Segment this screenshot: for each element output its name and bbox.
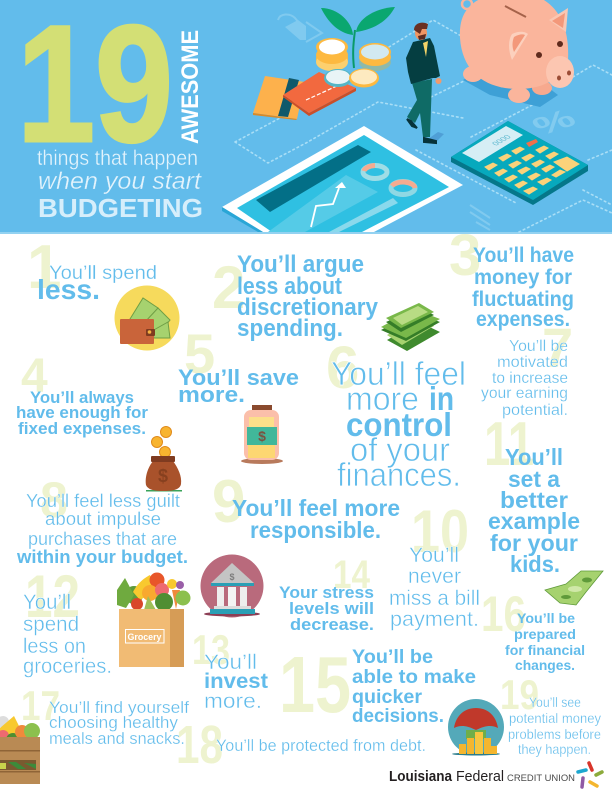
text: money for bbox=[474, 266, 572, 289]
text: quicker bbox=[352, 686, 422, 708]
text: meals and snacks. bbox=[49, 729, 185, 748]
number 6: 6 bbox=[326, 334, 359, 401]
text: for your bbox=[490, 530, 578, 556]
text: they happen. bbox=[518, 741, 591, 757]
text: decrease. bbox=[290, 616, 374, 634]
header banner bbox=[0, 0, 612, 234]
icon: umbrella over coins bbox=[448, 699, 504, 756]
text: decisions. bbox=[352, 705, 444, 727]
icon: money bag with coins: $ bbox=[158, 466, 168, 486]
text: potential. bbox=[502, 402, 568, 419]
illustration: calculator bbox=[451, 121, 588, 205]
text: prepared bbox=[514, 626, 576, 642]
icon: stack of money bbox=[381, 303, 440, 351]
text: You’ll be bbox=[509, 338, 568, 355]
illustration: credit cards bbox=[253, 72, 356, 120]
text: for financial bbox=[505, 642, 585, 658]
text: You’ll feel more bbox=[232, 495, 400, 521]
icon: percent sign: % bbox=[526, 103, 582, 141]
text: better bbox=[500, 487, 568, 513]
text bold: invest bbox=[204, 670, 268, 693]
text: You’ll argue bbox=[237, 251, 364, 278]
word: awesome: AWESOME bbox=[177, 30, 204, 144]
logo wordmark: CREDIT UNION bbox=[507, 773, 575, 784]
icon: jar of coins: $ bbox=[258, 428, 266, 444]
number 4: 4 bbox=[21, 350, 48, 403]
text: spend bbox=[23, 613, 79, 636]
text: purchases that are bbox=[28, 529, 177, 549]
text: You’ll be bbox=[352, 646, 433, 668]
text: expenses. bbox=[476, 308, 570, 331]
item 6 bbox=[326, 334, 466, 493]
text: less about bbox=[237, 273, 342, 300]
text: kids. bbox=[510, 551, 560, 577]
text: set a bbox=[508, 466, 560, 492]
number 10: 10 bbox=[411, 498, 469, 565]
text: more bbox=[346, 380, 419, 417]
text: example bbox=[488, 508, 580, 534]
icon: flying banknote bbox=[545, 571, 603, 605]
icon: grocery bag bbox=[117, 572, 190, 667]
text: never bbox=[408, 565, 461, 588]
text bold: within your budget. bbox=[16, 547, 188, 567]
label: grocery: Grocery bbox=[128, 632, 162, 642]
logo wordmark: Federal bbox=[456, 769, 504, 785]
text: choosing healthy bbox=[49, 713, 179, 732]
item 13 bbox=[192, 626, 268, 713]
item 7 bbox=[481, 316, 573, 419]
text: You’ll bbox=[505, 444, 563, 470]
title: 19 awesome things bbox=[17, 0, 204, 223]
icon: bank building: $ bbox=[229, 572, 235, 582]
text: groceries. bbox=[23, 655, 112, 678]
text: less on bbox=[23, 635, 86, 658]
number 5: 5 bbox=[184, 322, 215, 385]
text: You’ll spend bbox=[49, 262, 157, 284]
item 10 bbox=[389, 498, 480, 631]
subtitle line 1: things that happen bbox=[37, 147, 198, 170]
text bold: control bbox=[346, 406, 452, 443]
text: You’ll be protected from debt. bbox=[216, 737, 426, 755]
number 8: 8 bbox=[40, 472, 68, 528]
item 9 bbox=[212, 468, 400, 543]
text: You’ll save bbox=[178, 365, 299, 390]
icon: crate of vegetables bbox=[0, 716, 40, 784]
icon: money bag with coins bbox=[146, 426, 182, 492]
number 13: 13 bbox=[192, 626, 230, 673]
text: potential money bbox=[509, 710, 601, 726]
number 11: 11 bbox=[484, 410, 534, 479]
subtitle line 3: BUDGETING bbox=[38, 195, 203, 223]
text: motivated bbox=[497, 354, 568, 371]
illustration: tablet with charts bbox=[222, 126, 463, 232]
text: more. bbox=[178, 382, 245, 407]
item 14 bbox=[279, 553, 374, 634]
text: finances. bbox=[337, 456, 461, 493]
text: You’ll feel less guilt bbox=[26, 491, 180, 511]
text: about impulse bbox=[45, 509, 161, 529]
text: more. bbox=[204, 690, 262, 713]
icon: wallet with cash bbox=[114, 286, 180, 350]
text: You’ll always bbox=[30, 388, 134, 407]
text: You’ll be bbox=[517, 610, 575, 626]
illustration: calculator: 0000 bbox=[490, 133, 514, 147]
text: discretionary bbox=[237, 294, 379, 321]
logo wordmark: Louisiana bbox=[389, 769, 453, 785]
item 8 bbox=[16, 472, 188, 567]
number 7: 7 bbox=[542, 316, 573, 379]
item 17 bbox=[21, 682, 189, 748]
illustration: coins and plant bbox=[316, 7, 395, 88]
text: have enough for bbox=[16, 403, 148, 422]
number 3: 3 bbox=[449, 223, 481, 288]
item 15 bbox=[279, 640, 476, 729]
text: able to make bbox=[352, 666, 476, 688]
logo: Louisiana Federal Credit Union bbox=[389, 763, 602, 787]
text: changes. bbox=[515, 657, 575, 673]
text: to increase bbox=[492, 370, 568, 387]
number 17: 17 bbox=[21, 682, 60, 729]
text: spending. bbox=[237, 315, 343, 342]
text: You’ll bbox=[204, 651, 257, 674]
text: miss a bill bbox=[389, 587, 480, 610]
text: Your stress bbox=[279, 584, 374, 602]
text: your earning bbox=[481, 385, 568, 402]
text: fixed expenses. bbox=[18, 419, 146, 438]
text: You’ll bbox=[23, 591, 71, 614]
number 2: 2 bbox=[212, 254, 245, 321]
number 1: 1 bbox=[27, 233, 61, 302]
item 5 bbox=[178, 322, 299, 407]
text: You’ll find yourself bbox=[49, 698, 189, 717]
number 14: 14 bbox=[333, 553, 371, 597]
icon: jar of coins bbox=[241, 405, 283, 464]
number 15: 15 bbox=[279, 640, 351, 729]
text bold: less. bbox=[37, 274, 100, 305]
text: problems before bbox=[508, 726, 601, 742]
text: fluctuating bbox=[472, 288, 574, 311]
number 9: 9 bbox=[212, 468, 245, 535]
number 16: 16 bbox=[481, 586, 526, 642]
subtitle line 2: when you start bbox=[38, 168, 202, 195]
item 16 bbox=[481, 586, 585, 673]
item 3 bbox=[449, 223, 574, 331]
number 19: 19 bbox=[500, 671, 539, 718]
item 18 bbox=[176, 715, 426, 775]
text: You’ll bbox=[409, 544, 459, 567]
item 2 bbox=[212, 251, 379, 342]
text: levels will bbox=[289, 600, 374, 618]
icon: bank building bbox=[200, 554, 264, 618]
illustration: walking man bbox=[406, 23, 444, 144]
number 18: 18 bbox=[176, 715, 223, 775]
illustration: piggy bank bbox=[460, 0, 574, 107]
number 12: 12 bbox=[25, 563, 80, 630]
item 12 bbox=[23, 563, 112, 678]
text bold: in bbox=[429, 380, 454, 417]
text: of your bbox=[350, 431, 450, 468]
text: payment. bbox=[390, 608, 479, 631]
item 19 bbox=[500, 671, 601, 757]
text: responsible. bbox=[250, 517, 381, 543]
text: You’ll have bbox=[473, 244, 574, 267]
text: You’ll feel bbox=[331, 355, 466, 392]
logo icon bbox=[578, 763, 602, 787]
item 11 bbox=[484, 410, 580, 577]
item 1 bbox=[27, 233, 157, 305]
item 4 bbox=[16, 350, 148, 438]
text: You’ll see bbox=[529, 694, 581, 710]
